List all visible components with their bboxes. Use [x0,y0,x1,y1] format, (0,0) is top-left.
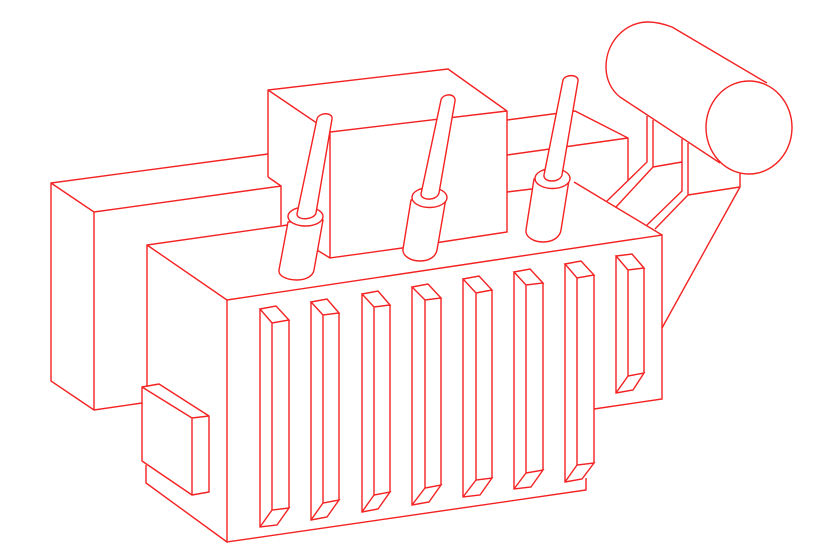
rear radiator housing: left box [51,154,281,410]
fin 7 [565,261,594,482]
fin 6 [514,269,543,489]
fin 4 [412,284,441,505]
bushing 2 [403,95,455,261]
radiator fins [260,254,644,527]
main tank body [146,182,662,542]
top terminal box [268,69,507,258]
fin 5 [463,276,492,497]
fin 3 [362,291,390,512]
fin 1 [260,306,289,527]
fin 2 [311,299,339,520]
control cabinet on side of tank [142,384,209,495]
fin 8 short [616,254,644,393]
bushing 3 [526,76,578,242]
rear housing: right section [507,111,628,192]
bushing 1 [279,114,332,280]
conservator support pipes [607,116,740,328]
conservator tank cylinder [606,22,792,174]
